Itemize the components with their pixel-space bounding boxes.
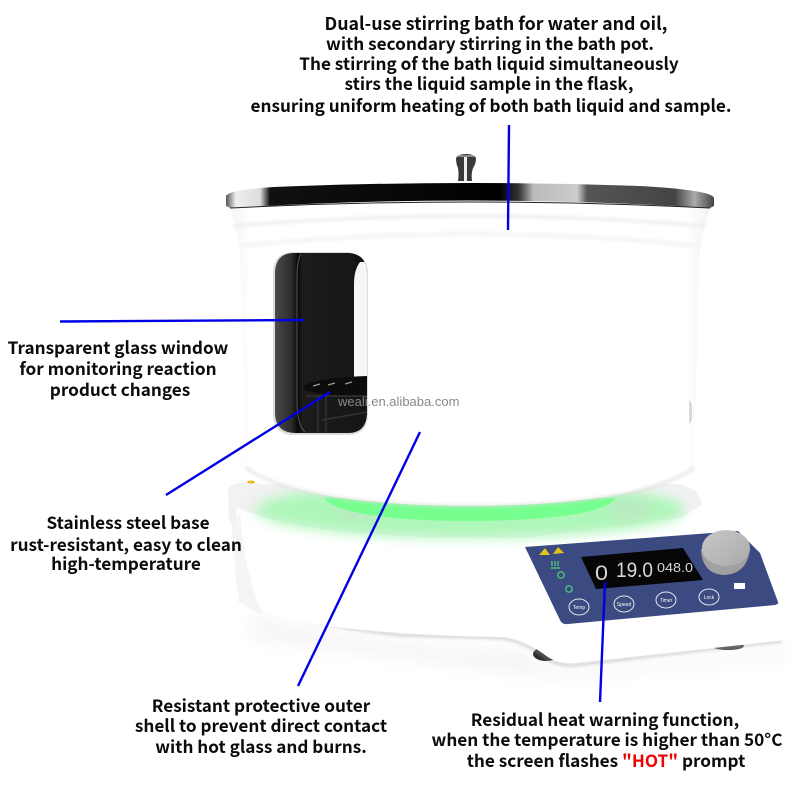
high/low switch	[734, 583, 745, 589]
text: glass window	[8, 334, 229, 401]
text: outer shell	[135, 692, 387, 758]
watermark: weali.en.alibaba.com	[337, 394, 459, 409]
base feet	[533, 642, 744, 661]
display screen: 0	[595, 562, 608, 585]
text: steel base: Stainless steel base	[46, 509, 210, 534]
glass bath body	[231, 208, 710, 506]
control panel: Timer	[660, 598, 673, 604]
display screen: 048.0	[657, 560, 693, 575]
text: glass window: product changes	[50, 376, 190, 401]
floor shadow	[250, 615, 790, 680]
glass window	[273, 252, 368, 435]
text: steel base: high-temperature	[51, 550, 201, 575]
text: top description: stirs the liquid sample in the flask,	[345, 70, 633, 95]
warning icons	[539, 547, 564, 555]
text: glass window: for monitoring reaction	[19, 355, 217, 380]
collar shading	[234, 216, 706, 226]
status icons	[551, 561, 572, 592]
buttons	[569, 589, 719, 615]
leader line: top	[508, 125, 509, 230]
text: outer shell: Resistant protective outer	[152, 692, 371, 717]
text: steel base	[10, 509, 242, 575]
text: heat warning	[432, 706, 782, 772]
text: outer shell: with hot glass and burns.	[155, 733, 367, 758]
text: glass window: Transparent glass window	[8, 334, 229, 359]
text: top description: with secondary stirring in the bath pot.	[326, 30, 654, 55]
control panel: Lock	[704, 595, 715, 601]
dial	[701, 530, 750, 575]
text: heat warning: Residual heat warning function,	[471, 706, 739, 731]
leader line: window	[60, 320, 304, 322]
text: outer shell: shell to prevent direct contact	[135, 712, 387, 737]
leader line: heat warning	[600, 582, 605, 702]
base	[228, 475, 787, 665]
control panel	[525, 530, 778, 624]
product: stirring bath	[226, 154, 790, 680]
leader line: outer shell	[298, 432, 420, 686]
text: top description: The stirring of the bath liquid simultaneously	[299, 50, 679, 75]
base left flange shade	[228, 482, 262, 560]
text: top description	[251, 10, 731, 117]
text: top description: Dual-use stirring bath for water and oil,	[325, 10, 667, 36]
text: heat warning: when the temperature is higher than 50°C	[432, 726, 782, 751]
window stirring rack	[304, 376, 367, 433]
green glow ring	[237, 482, 702, 538]
lid knob	[456, 154, 476, 181]
control panel: Speed	[617, 602, 631, 608]
display screen	[581, 548, 703, 589]
text: top description: ensuring uniform heating of both bath liquid and sample.	[251, 92, 731, 117]
lid	[226, 183, 714, 208]
text: steel base: rust-resistant, easy to clean	[10, 531, 242, 556]
leader line: steel base	[166, 392, 330, 495]
text: heat warning: the screen flashes "HOT" prompt	[467, 747, 745, 772]
display screen: 19.0	[616, 559, 653, 582]
control panel: Temp	[573, 605, 585, 611]
